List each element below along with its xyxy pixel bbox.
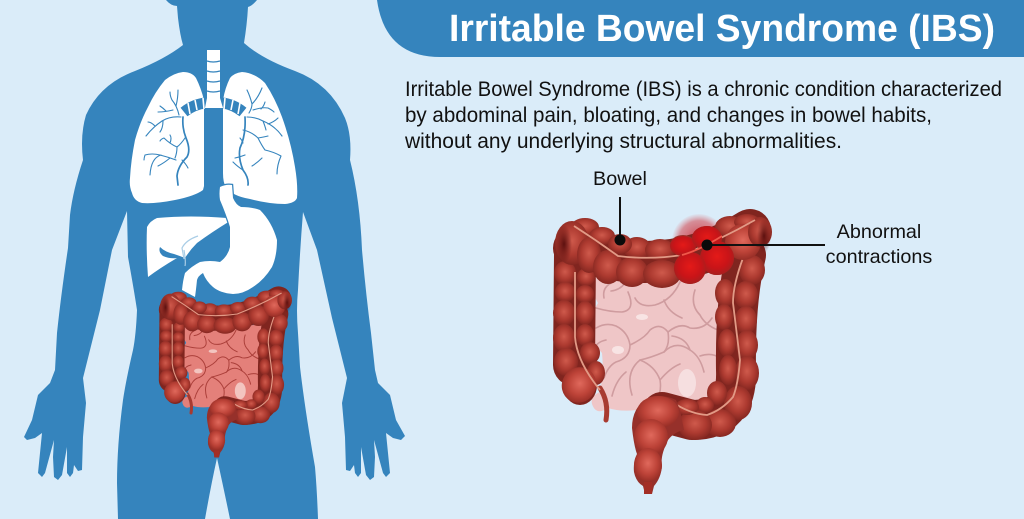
description text: by abdominal pain, bloating, and changes in bowel habits,	[405, 104, 932, 127]
bronchial tree right	[239, 117, 248, 185]
description text: without any underlying structural abnormalities.	[404, 130, 842, 153]
organ: stomach	[182, 185, 277, 297]
organ: small intestine (body view)	[182, 325, 263, 408]
abnormal contraction red haustra	[670, 226, 734, 284]
right lung	[223, 72, 297, 204]
organ: liver	[147, 216, 230, 277]
description text	[404, 78, 1002, 153]
organ: lungs and trachea	[130, 50, 297, 204]
label: Abnormal contractions with leader: Abnormal	[837, 221, 921, 243]
organ: large intestine (body view)	[159, 289, 292, 457]
bronchial tree left	[144, 88, 282, 185]
pain halo behind colon	[672, 214, 726, 268]
large illustration: small intestine	[592, 273, 724, 411]
trachea	[207, 50, 220, 108]
label: Abnormal contractions with leader: contractions	[826, 246, 932, 268]
label: Bowel with leader: Bowel	[593, 168, 647, 190]
bronchi	[184, 103, 243, 112]
description text: Irritable Bowel Syndrome (IBS) is a chronic condition characterized	[405, 78, 1002, 101]
human body silhouette	[24, 0, 405, 519]
large illustration: large intestine	[553, 214, 772, 494]
label: Bowel with leader	[593, 168, 647, 246]
label: Abnormal contractions with leader	[702, 221, 932, 268]
title: Irritable Bowel Syndrome (IBS)	[449, 8, 995, 50]
header banner	[377, 0, 1024, 57]
left lung	[130, 72, 205, 203]
